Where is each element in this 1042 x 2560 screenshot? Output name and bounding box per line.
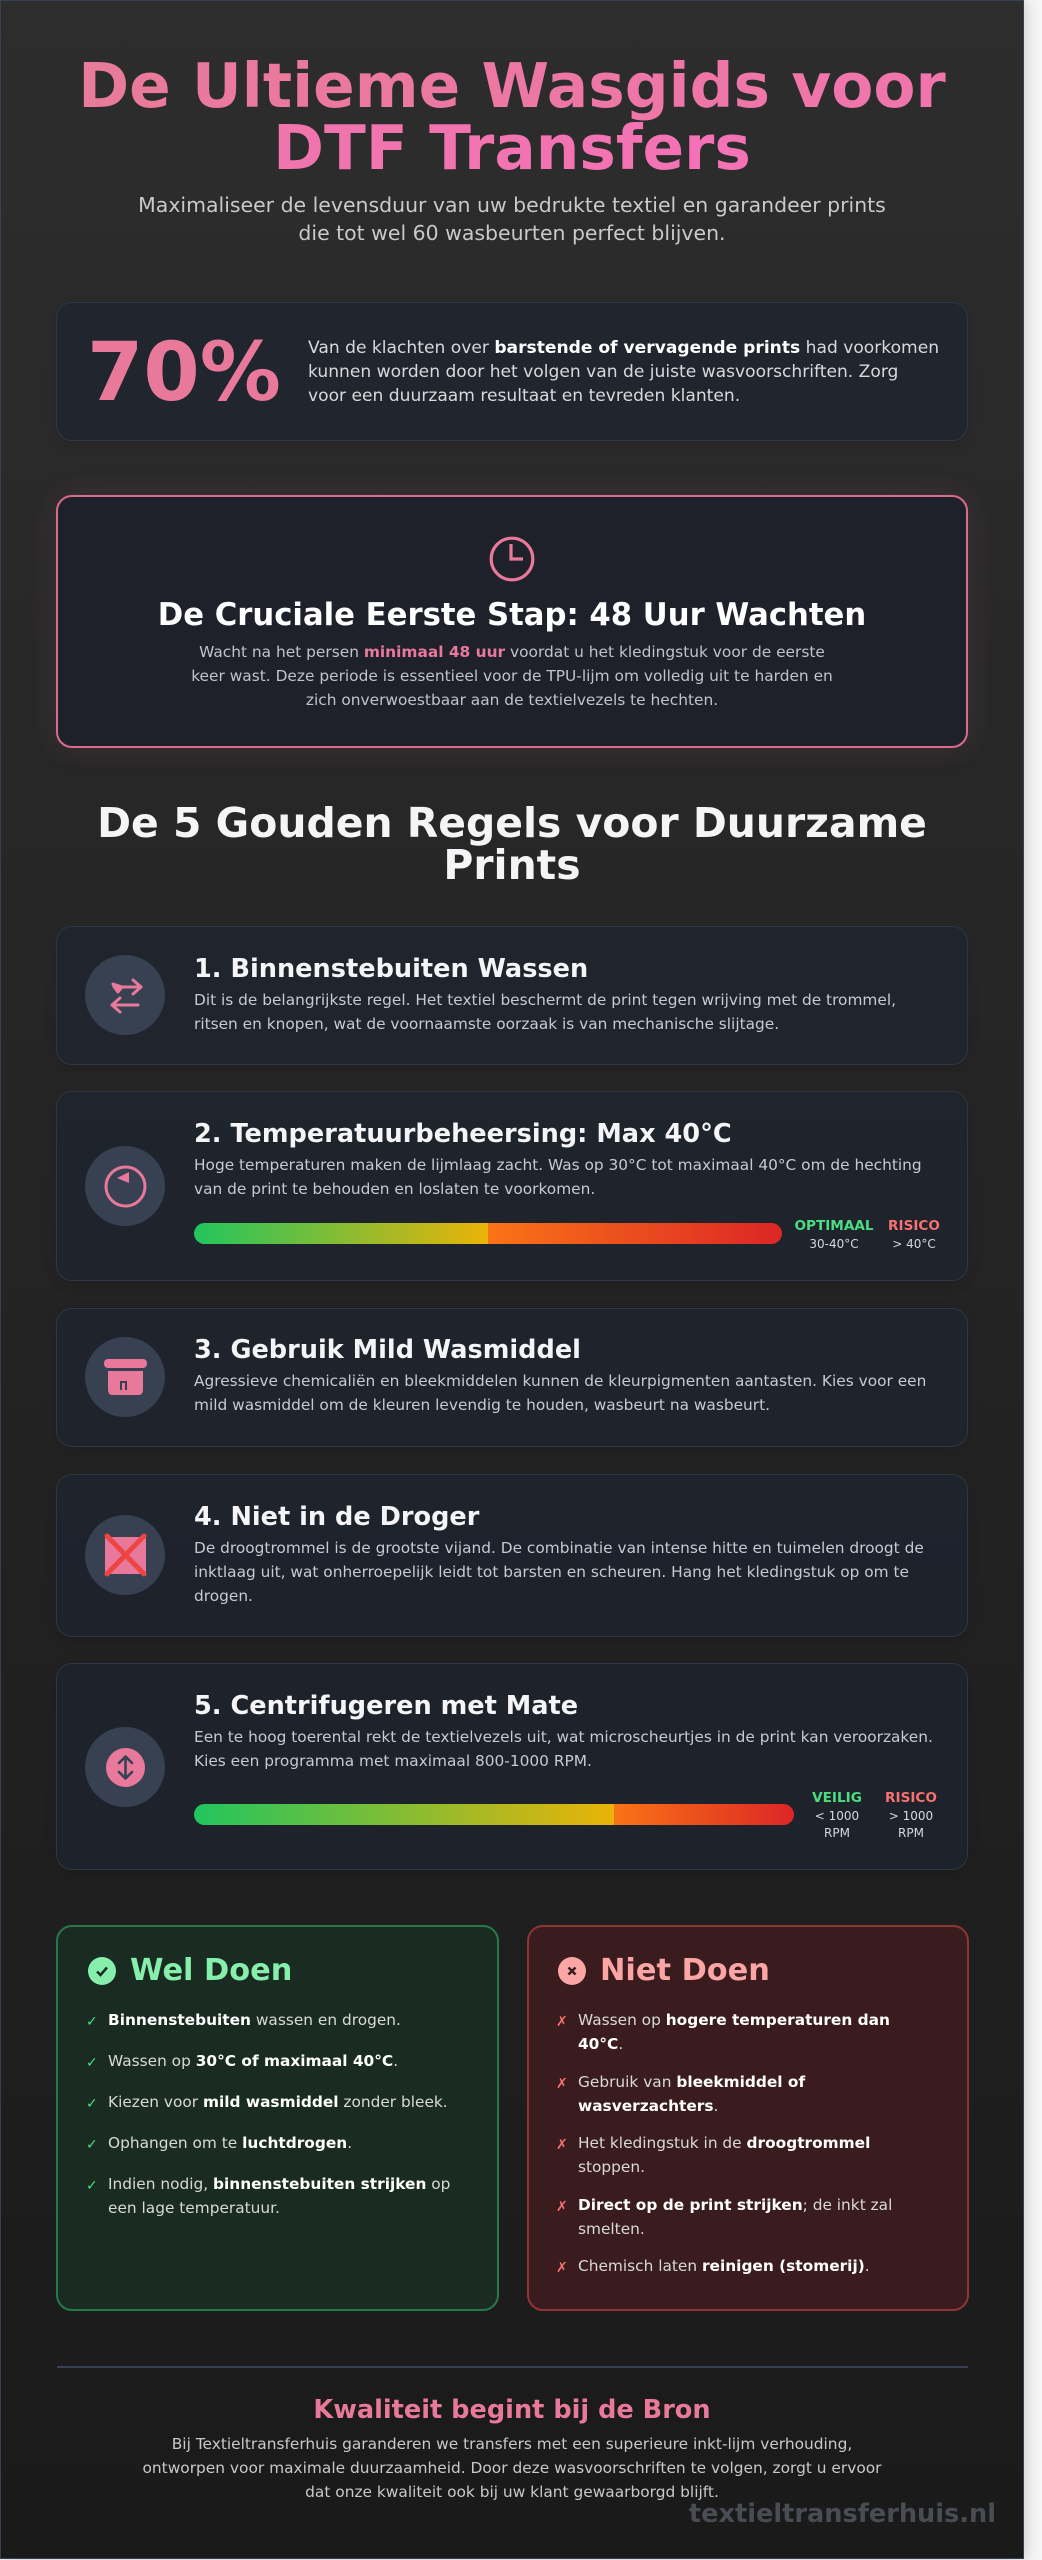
rule 5 title: 5. Centrifugeren met Mate <box>194 1691 578 1721</box>
temperature gauge bar <box>194 1223 782 1244</box>
label: risk: RISICO <box>885 1790 937 1806</box>
icon: no dryer <box>85 1515 165 1595</box>
footer text: ontworpen voor maximale duurzaamheid. Door deze wasvoorschriften te volgen, zorgt u ervoor <box>142 2459 882 2477</box>
rule 5 text: Een te hoog toerental rekt de textielvezels uit, wat microscheurtjes in de print kan veroorzaken. <box>194 1728 933 1746</box>
big number: 70% <box>87 326 281 420</box>
do item 5: een lage temperatuur. <box>108 2199 280 2217</box>
do item 3: Kiezen voor mild wasmiddel zonder bleek. <box>108 2093 448 2111</box>
panel: don't <box>526 1925 968 2311</box>
text: ✓ <box>86 2014 98 2030</box>
icon: spin speed <box>85 1727 165 1807</box>
rule 3 title: 3. Gebruik Mild Wasmiddel <box>194 1335 581 1365</box>
rule 4 text <box>194 1539 924 1605</box>
icon: cross circle <box>558 1957 586 1985</box>
text: ✓ <box>86 2137 98 2153</box>
title: DTF Transfers <box>273 113 751 184</box>
do heading: Wel Doen <box>130 1953 292 1988</box>
don't item 1 <box>556 2011 890 2053</box>
watermark: textieltransferhuis.nl <box>689 2499 996 2529</box>
label: risk: > 40°C <box>892 1237 936 1251</box>
rule 3 text: Agressieve chemicaliën en bleekmiddelen kunnen de kleurpigmenten aantasten. Kies voor een <box>194 1372 926 1390</box>
label: optimal: OPTIMAAL <box>794 1218 874 1234</box>
rule 4 text: drogen. <box>194 1587 253 1605</box>
title: De Ultieme Wasgids voor <box>78 51 946 122</box>
stat text <box>308 338 939 406</box>
label: risk: > 1000 <box>889 1809 933 1823</box>
panel: rule 2 <box>56 1091 968 1281</box>
rule 2 text: van de print te behouden en loslaten te voorkomen. <box>194 1180 595 1198</box>
panel: do <box>56 1925 499 2311</box>
crucial step heading: De Cruciale Eerste Stap: 48 Uur Wachten <box>158 598 866 633</box>
text: ✗ <box>556 2260 568 2276</box>
label: safe <box>812 1790 862 1840</box>
footer text: dat onze kwaliteit ook bij uw klant gewaarborgd blijft. <box>305 2483 719 2501</box>
don't item 2 <box>556 2073 806 2115</box>
text: ✓ <box>86 2096 98 2112</box>
rule 5 text: Kies een programma met maximaal 800-1000 RPM. <box>194 1752 592 1770</box>
rule 1 text <box>194 991 896 1033</box>
label: risk: RPM <box>898 1826 924 1840</box>
don't item 4 <box>556 2196 892 2238</box>
crucial step text: zich onverwoestbaar aan de textielvezels te hechten. <box>306 691 718 709</box>
don't item 2: wasverzachters. <box>578 2097 718 2115</box>
label: safe: < 1000 <box>815 1809 859 1823</box>
rule 1 text: Dit is de belangrijkste regel. Het textiel beschermt de print tegen wrijving met de trommel, <box>194 991 896 1009</box>
subtitle <box>138 193 886 245</box>
rule 2 text <box>194 1156 922 1198</box>
rule 4 title: 4. Niet in de Droger <box>194 1502 479 1532</box>
do list <box>86 2011 450 2217</box>
subtitle: Maximaliseer de levensduur van uw bedrukte textiel en garandeer prints <box>138 193 886 217</box>
crucial step text <box>191 643 833 709</box>
don't item 1: Wassen op hogere temperaturen dan <box>578 2011 890 2029</box>
section heading: golden rules: Prints <box>443 841 581 889</box>
stat text: voor een duurzaam resultaat en tevreden klanten. <box>308 386 740 406</box>
do item 2: Wassen op 30°C of maximaal 40°C. <box>108 2052 398 2070</box>
label: risk <box>885 1790 937 1840</box>
icon: clock <box>490 536 534 582</box>
text: ✗ <box>556 2137 568 2153</box>
don't item 3: stoppen. <box>578 2158 645 2176</box>
footer heading: Kwaliteit begint bij de Bron <box>313 2395 711 2425</box>
label: risk <box>888 1218 940 1251</box>
stat text: kunnen worden door het volgen van de juiste wasvoorschriften. Zorg <box>308 362 898 382</box>
don't list <box>556 2011 892 2276</box>
label: optimal <box>794 1218 874 1251</box>
don't item 1: 40°C. <box>578 2035 623 2053</box>
spin gauge bar <box>194 1804 794 1825</box>
rule 3 text: mild wasmiddel om de kleuren levendig te houden, wasbeurt na wasbeurt. <box>194 1396 770 1414</box>
label: optimal: 30-40°C <box>809 1237 859 1251</box>
rule 2 text: Hoge temperaturen maken de lijmlaag zacht. Was op 30°C tot maximaal 40°C om de hechting <box>194 1156 922 1174</box>
panel: crucial first step <box>56 495 968 748</box>
label: safe: VEILIG <box>812 1790 862 1806</box>
rule 4 text: inktlaag uit, wat onherroepelijk leidt tot barsten en scheuren. Hang het kledingstuk op om te <box>194 1563 909 1581</box>
panel: rule 5 <box>56 1663 968 1870</box>
don't item 3 <box>556 2134 870 2176</box>
don't item 4: Direct op de print strijken; de inkt zal <box>578 2196 892 2214</box>
subtitle: die tot wel 60 wasbeurten perfect blijven. <box>298 221 726 245</box>
don't item 3: Het kledingstuk in de droogtrommel <box>578 2134 870 2152</box>
rule 4 text: De droogtrommel is de grootste vijand. De combinatie van intense hitte en tuimelen droogt de <box>194 1539 924 1557</box>
rule 1 text: ritsen en knopen, wat de voornaamste oorzaak is van mechanische slijtage. <box>194 1015 779 1033</box>
rule 1 title: 1. Binnenstebuiten Wassen <box>194 954 588 984</box>
label: safe: RPM <box>824 1826 850 1840</box>
do item 4: Ophangen om te luchtdrogen. <box>108 2134 352 2152</box>
icon: reverse arrows <box>85 955 165 1035</box>
footer text: Bij Textieltransferhuis garanderen we transfers met een superieure inkt-lijm verhouding, <box>172 2435 852 2453</box>
stat text: Van de klachten over barstende of vervagende prints had voorkomen <box>308 338 939 358</box>
text: ✗ <box>556 2076 568 2092</box>
do item 1: Binnenstebuiten wassen en drogen. <box>108 2011 401 2029</box>
text: ✗ <box>556 2199 568 2215</box>
panel: rule 4 <box>56 1474 968 1637</box>
footer text <box>142 2435 882 2501</box>
don't item 4: smelten. <box>578 2220 645 2238</box>
section heading: golden rules: De 5 Gouden Regels voor Duurzame <box>97 799 927 847</box>
icon: detergent box <box>85 1337 165 1417</box>
do item 5 <box>86 2175 450 2217</box>
do item 5: Indien nodig, binnenstebuiten strijken op <box>108 2175 450 2193</box>
panel: 70% statistic <box>56 302 968 441</box>
text: ✓ <box>86 2055 98 2071</box>
icon: temperature dial <box>85 1146 165 1226</box>
don't heading: Niet Doen <box>600 1953 770 1988</box>
crucial step text: Wacht na het persen minimaal 48 uur voordat u het kledingstuk voor de eerste <box>199 643 825 661</box>
section heading: golden rules <box>97 799 927 889</box>
title <box>78 51 946 184</box>
rule 5 text <box>194 1728 933 1770</box>
don't item 2: Gebruik van bleekmiddel of <box>578 2073 805 2091</box>
icon: check circle <box>88 1957 116 1985</box>
rule 3 text <box>194 1372 926 1414</box>
crucial step text: keer wast. Deze periode is essentieel voor de TPU-lijm om volledig uit te harden en <box>191 667 833 685</box>
panel: rule 3 <box>56 1308 968 1447</box>
text: ✗ <box>556 2014 568 2030</box>
panel: rule 1 <box>56 926 968 1065</box>
rule 2 title: 2. Temperatuurbeheersing: Max 40°C <box>194 1119 732 1149</box>
label: risk: RISICO <box>888 1218 940 1234</box>
don't item 5: Chemisch laten reinigen (stomerij). <box>578 2257 870 2275</box>
text: ✓ <box>86 2178 98 2194</box>
